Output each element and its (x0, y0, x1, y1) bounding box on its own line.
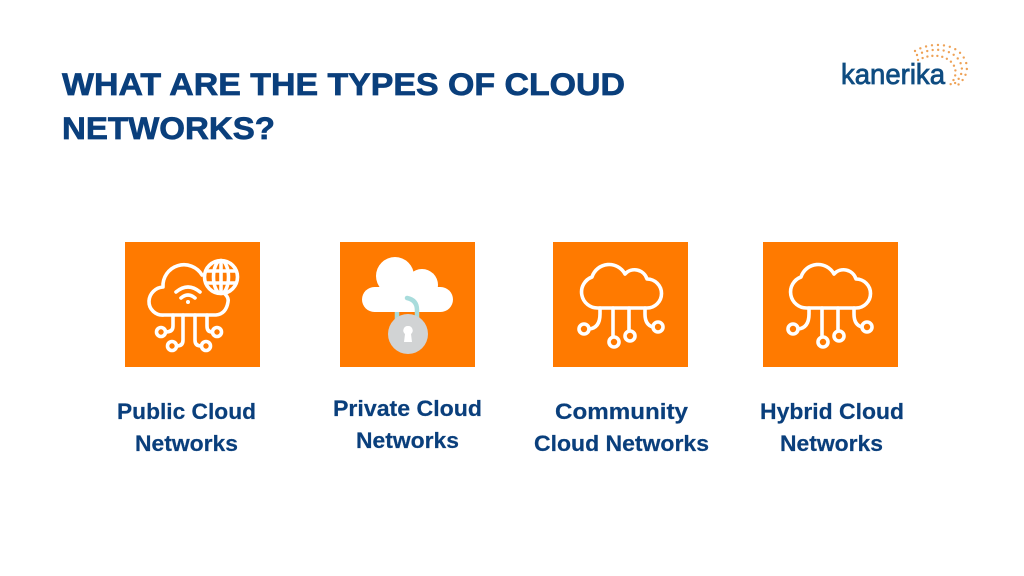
label: private cloud networks (333, 396, 482, 453)
panel: private cloud networks (340, 242, 475, 367)
logo dots (915, 45, 967, 86)
logo: kanerika: kanerika (841, 59, 946, 91)
label: public cloud networks: Public Cloud (117, 399, 256, 424)
title: NETWORKS? (62, 110, 275, 146)
orange tile (125, 242, 260, 367)
orange tile (553, 242, 688, 367)
label: private cloud networks: Private Cloud (333, 396, 482, 421)
panel: community cloud networks (553, 242, 688, 367)
label: hybrid cloud networks (760, 399, 904, 456)
label: hybrid cloud networks: Hybrid Cloud (760, 399, 904, 424)
panel: hybrid cloud networks (763, 242, 898, 367)
label: private cloud networks: Networks (356, 428, 459, 453)
icon: cloud with circuit nodes (579, 265, 663, 347)
label: community cloud networks: Community (555, 399, 689, 424)
label: community cloud networks: Cloud Networks (534, 431, 709, 456)
logo: kanerika (841, 45, 967, 91)
label: community cloud networks (534, 399, 709, 456)
icon: white cloud with padlock (362, 257, 453, 354)
label: public cloud networks: Networks (135, 431, 238, 456)
icon: cloud with wifi, globe and circuit nodes (149, 260, 238, 350)
label: hybrid cloud networks: Networks (780, 431, 883, 456)
orange tile (763, 242, 898, 367)
label: public cloud networks (117, 399, 256, 456)
icon: cloud with circuit nodes (788, 265, 872, 347)
title (62, 66, 625, 146)
orange tile (340, 242, 475, 367)
title: WHAT ARE THE TYPES OF CLOUD (62, 66, 625, 102)
panel: public cloud networks (125, 242, 260, 367)
